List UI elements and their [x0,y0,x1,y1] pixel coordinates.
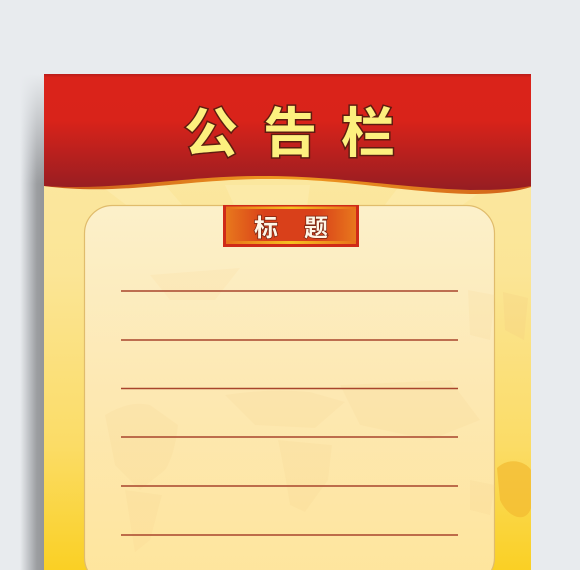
badge: heading: 题 [304,215,328,242]
panel: content area [84,206,495,570]
badge text: 标 [254,215,278,242]
header: red band: 告 [263,104,317,164]
light rays [100,185,490,330]
notice board [44,74,531,570]
board shadow [20,74,44,570]
title: 公 [184,104,238,164]
ruled lines [121,291,458,535]
header: red band [44,74,531,194]
map accent: right edge [503,292,528,340]
badge: heading [223,205,359,247]
world map watermark [105,268,495,552]
wave accent [44,150,531,194]
Australia map accent [497,461,531,517]
header: red band: 栏 [341,104,395,164]
